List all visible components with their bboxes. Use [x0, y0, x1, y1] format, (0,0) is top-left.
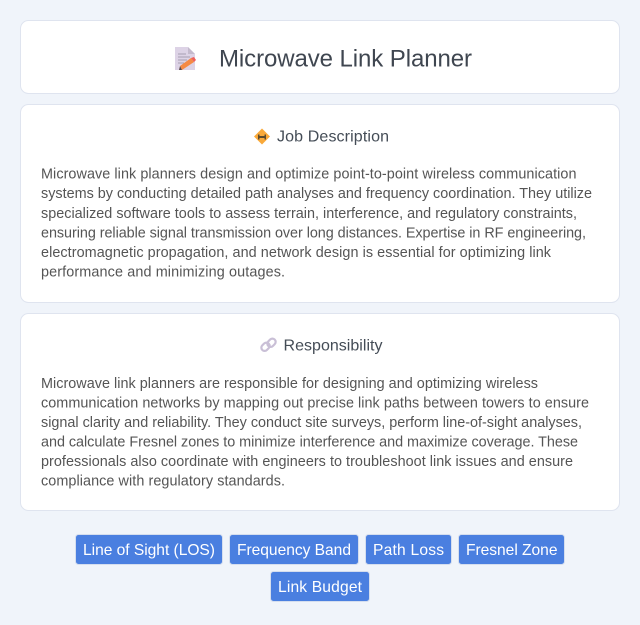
panel: job description	[20, 104, 620, 302]
responsibility body text	[41, 376, 589, 490]
tag: fresnel zone	[458, 534, 564, 564]
icon: diamond sign	[254, 128, 270, 144]
heading: responsibility: Responsibility	[284, 338, 382, 354]
job description body text: specialized software tools to assess terrain, interference, and regulatory constraints,	[41, 206, 577, 222]
job description body text: electromagnetic propagation, and network design is essential for optimizing link	[41, 245, 552, 261]
heading: job description: Job Description	[277, 128, 389, 146]
responsibility body text: communication networks by mapping out precise link paths between towers to ensure	[41, 395, 589, 411]
title text: Microwave Link Planner	[219, 46, 472, 72]
panel: title	[20, 20, 620, 94]
panel: responsibility	[20, 314, 620, 510]
tag: line of sight	[76, 534, 222, 564]
job description body text	[41, 166, 592, 281]
responsibility body text: professionals also coordinate with engineers to troubleshoot link issues and ensure	[41, 454, 573, 470]
tag: line of sight: Line of Sight (LOS)	[83, 542, 215, 559]
responsibility body text: Microwave link planners are responsible for designing and optimizing wireless	[41, 376, 538, 392]
job description body text: Microwave link planners design and optimize point-to-point wireless communication	[41, 166, 576, 182]
responsibility body text: compliance with regulatory standards.	[41, 474, 285, 490]
icon: chain link	[260, 337, 277, 352]
responsibility body text: and calculate Fresnel zones to minimize interference and maximize coverage. These	[41, 435, 578, 451]
tag: frequency band	[230, 534, 358, 564]
icon: document with pencil	[175, 47, 196, 70]
tag: link budget: Link Budget	[278, 579, 363, 596]
tag: fresnel zone: Fresnel Zone	[466, 542, 558, 559]
responsibility body text: signal clarity and reliability. They conduct site surveys, perform line-of-sight analyses,	[41, 415, 582, 431]
job description body text: ensuring reliable signal transmission over long distances. Expertise in RF engineering,	[41, 225, 586, 241]
tag: frequency band: Frequency Band	[237, 542, 351, 559]
job description body text: systems by conducting detailed path analyses and frequency coordination. They utilize	[41, 186, 592, 202]
tag: path loss	[366, 534, 452, 564]
job description body text: performance and minimizing outages.	[41, 265, 285, 281]
tag: path loss: Path Loss	[373, 542, 444, 559]
tag: link budget	[270, 572, 370, 602]
